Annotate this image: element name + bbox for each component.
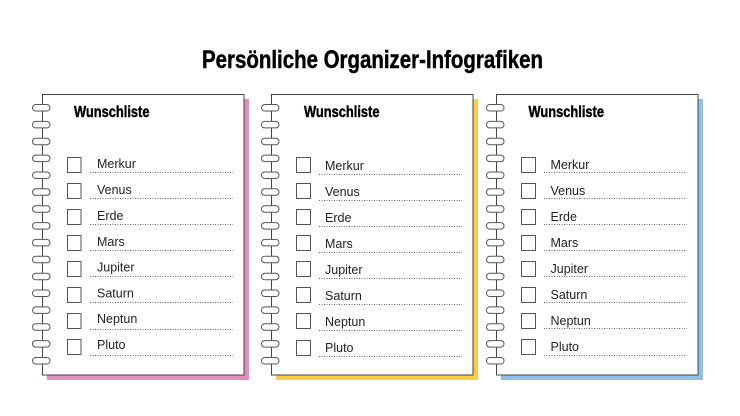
checklist: Pluto <box>550 340 579 354</box>
checklist: Mars <box>97 235 125 249</box>
heading: Wunschliste: Wunschliste <box>74 104 150 121</box>
notebook page <box>496 94 698 375</box>
checklist <box>522 158 687 356</box>
checklist: Jupiter <box>325 263 363 277</box>
heading: Wunschliste: Wunschliste <box>528 104 604 121</box>
checklist: Mars <box>325 237 353 251</box>
checklist: Merkur <box>550 158 589 172</box>
checklist: Venus <box>325 185 360 199</box>
checklist: Mars <box>550 236 578 250</box>
checklist <box>296 158 462 356</box>
notebook page <box>42 94 244 375</box>
checklist: Venus <box>97 183 132 197</box>
spiral rings <box>486 104 504 364</box>
notebook page <box>272 94 473 375</box>
checklist: Venus <box>550 184 585 198</box>
yellow shadow <box>276 99 478 380</box>
checklist: Neptun <box>97 312 137 326</box>
checklist: Pluto <box>325 341 354 355</box>
checklist: Merkur <box>97 157 136 171</box>
panel: blue notebook <box>486 94 703 380</box>
checklist: Neptun <box>325 315 365 329</box>
heading: Wunschliste: Wunschliste <box>304 104 380 121</box>
blue shadow <box>501 99 703 380</box>
checklist: Saturn <box>97 286 134 300</box>
checklist: Erde <box>550 210 577 224</box>
checklist: Saturn <box>550 288 587 302</box>
checklist: Pluto <box>97 338 126 352</box>
panel: pink notebook <box>32 94 249 380</box>
checklist: Neptun <box>550 314 591 328</box>
panel: yellow notebook <box>262 94 478 380</box>
checklist: Saturn <box>325 289 362 303</box>
checklist: Erde <box>97 209 123 223</box>
checklist: Erde <box>325 211 351 225</box>
title: Persönliche Organizer-Infografiken <box>202 46 543 74</box>
checklist <box>68 157 233 356</box>
spiral rings <box>262 104 279 364</box>
spiral rings <box>32 104 50 364</box>
checklist: Jupiter <box>97 260 135 274</box>
pink shadow <box>47 99 249 380</box>
checklist: Merkur <box>325 159 364 173</box>
checklist: Jupiter <box>550 262 588 276</box>
